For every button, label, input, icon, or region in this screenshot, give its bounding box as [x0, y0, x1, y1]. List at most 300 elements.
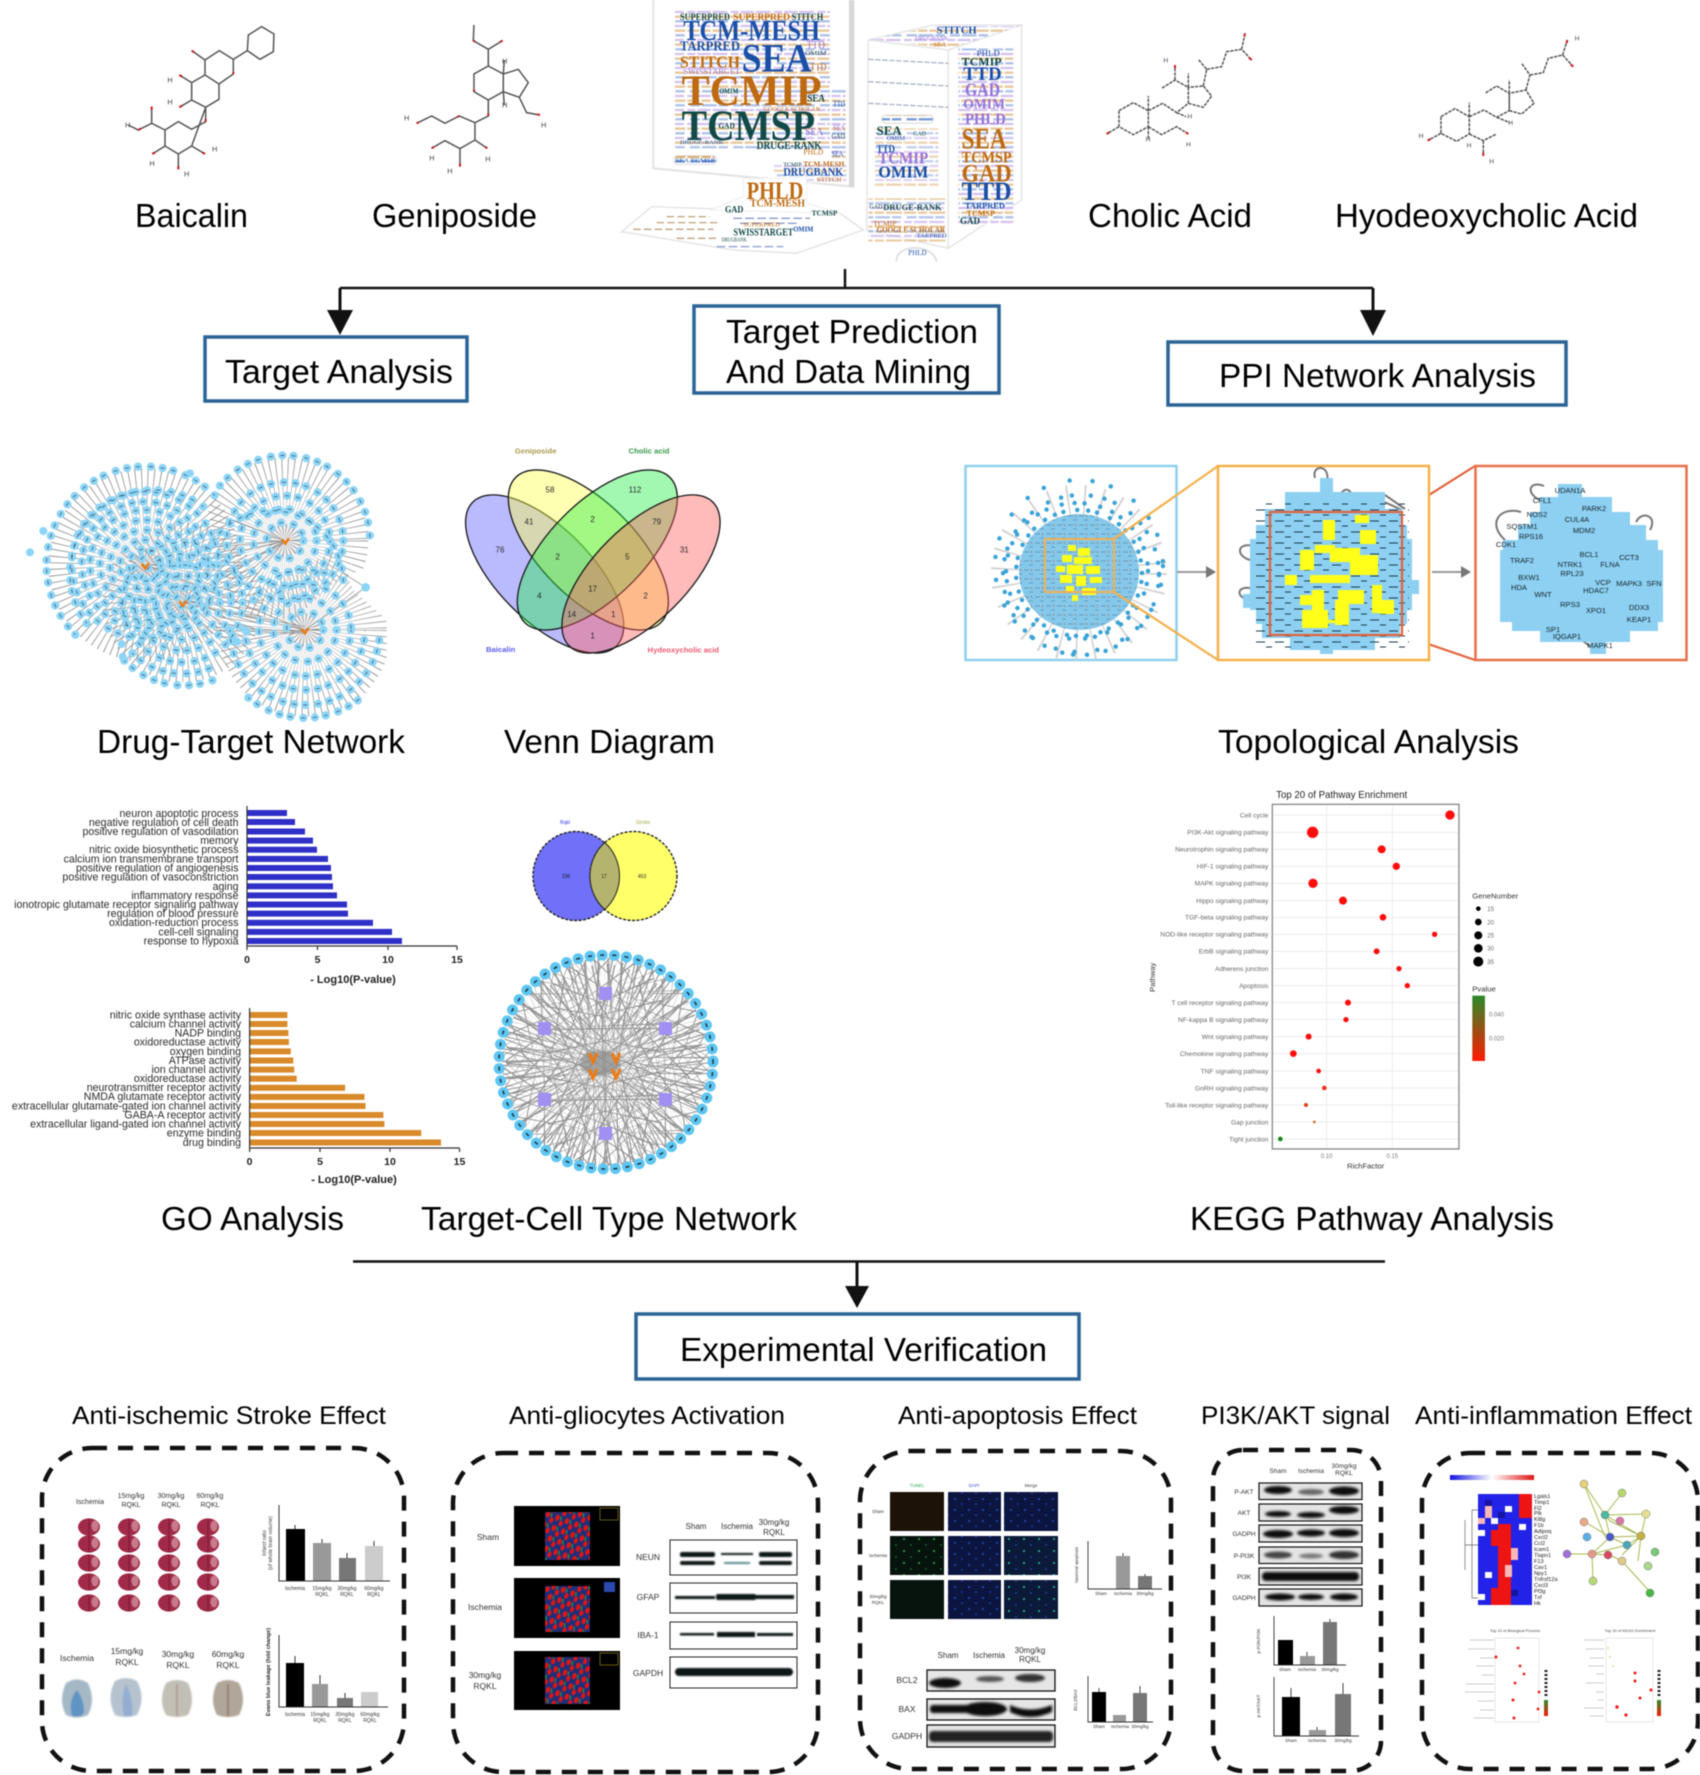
panel: core targets: CDK1: [1496, 540, 1516, 549]
panel: core targets: RPS16: [1519, 532, 1543, 541]
monitor stand and keyboard: TCMSP: [812, 209, 838, 218]
pathway labels: ErbB signaling pathway: [1199, 949, 1269, 956]
molecule: Geniposide: H: [404, 114, 409, 123]
computer tower: GAD: [965, 80, 1000, 101]
set names: Geniposide: [515, 446, 557, 455]
drug hubs: [589, 1053, 620, 1078]
infarct ratio chart: Ischemia: [285, 1586, 305, 1592]
counts: 1: [611, 610, 616, 619]
computer tower: TTD: [963, 64, 1002, 85]
TUNEL row labels: 30mg/kg: [869, 1594, 887, 1599]
panel: anti-apoptosis effect: [860, 1451, 1171, 1769]
blot headers: 30mg/kg: [1015, 1646, 1045, 1655]
title: Anti-gliocytes Activation: Anti-gliocytes Activation: [509, 1402, 785, 1430]
axis titles: 0.10: [1321, 1154, 1333, 1160]
Evans blue labels: 15mg/kg: [111, 1646, 144, 1656]
counts: 17: [588, 585, 598, 594]
monitor words: SUPERPRED: [733, 12, 791, 22]
molecule: Geniposide: H: [429, 154, 435, 163]
outer node label marks: [499, 955, 713, 1169]
counts: 2: [555, 552, 560, 561]
box: Target Analysis: Target Analysis: [225, 353, 453, 390]
blot labels: AKT: [1238, 1510, 1250, 1517]
Evans blue chart: [266, 1628, 388, 1724]
panel: core targets: CUL4A: [1565, 515, 1590, 524]
monitor words: OMIM: [805, 50, 827, 57]
molecule: Hyodeoxycholic Acid: [1419, 36, 1580, 165]
Evans blue labels: 30mg/kg: [162, 1649, 195, 1659]
two-set Venn diagram: 296: [562, 874, 570, 880]
panel: core targets: BCL1: [1580, 550, 1598, 559]
blot labels: BCL2: [896, 1675, 918, 1685]
heatmap gene labels: Plk: [1534, 1511, 1542, 1517]
monitor words: STITCH: [817, 177, 842, 184]
KEGG pathway bubble chart: [1148, 790, 1519, 1170]
TTC column labels: 30mg/kg: [158, 1493, 185, 1500]
legend: gene number: [1472, 892, 1519, 967]
category labels: negative regulation of cell death: [89, 817, 239, 829]
Evans blue chart: RQKL: [363, 1718, 377, 1724]
panel: full PPI network: [966, 466, 1176, 660]
pathway labels: Gap junction: [1231, 1119, 1269, 1126]
axes: [247, 806, 457, 950]
label: Geniposide: Geniposide: [372, 197, 537, 234]
molecule: Baicalin: [125, 27, 274, 179]
tick labels: 0: [247, 1156, 253, 1168]
heatmap: [1465, 1494, 1532, 1605]
blot labels: [1232, 1489, 1256, 1602]
monitor words: DRUGBANK: [783, 165, 844, 179]
heatmap gene labels: Fl2: [1534, 1506, 1542, 1512]
TUNEL headers: DAPI: [969, 1483, 979, 1488]
monitor words: SEA: [742, 36, 812, 81]
tick labels: 5: [315, 954, 321, 966]
western blot headers: 30mg/kg: [759, 1518, 789, 1527]
two-set Venn diagram: [533, 820, 677, 920]
panel: core targets: MAPK1: [1587, 641, 1613, 650]
computer tower: SEA: [933, 42, 947, 49]
TUNEL headers: Merge: [1025, 1483, 1038, 1488]
western blots: [1259, 1483, 1362, 1606]
legend: gene number: GeneNumber: [1472, 892, 1519, 901]
TUNEL row labels: Sham: [872, 1509, 884, 1514]
panel: anti-ischemic stroke effect: [42, 1448, 404, 1771]
pathway labels: Chemokine signaling pathway: [1180, 1051, 1269, 1058]
label: GO Analysis: GO Analysis: [161, 1200, 344, 1237]
legend: gene number: 35: [1487, 960, 1495, 966]
topological analysis panels: [966, 466, 1686, 660]
GO dot plot: [1465, 1628, 1548, 1722]
two-set Venn diagram: Rqkl: [560, 820, 570, 826]
blot headers: RQKL: [1335, 1470, 1353, 1477]
western blot labels: [633, 1552, 663, 1678]
computer tower: OMIM: [887, 135, 905, 142]
monitor words: TTD: [810, 63, 827, 74]
monitor stand and keyboard: GAD: [725, 205, 744, 215]
p-AKT chart: Ischemia: [1298, 1667, 1316, 1672]
counts: 4: [537, 592, 542, 601]
BCL2/BAX chart: Sham: [1093, 1724, 1105, 1729]
TUNEL row labels: Ischemia: [869, 1553, 887, 1558]
axis titles: Pathway: [1148, 962, 1157, 992]
heatmap gene labels: Tnfrsf12a: [1534, 1577, 1559, 1583]
zoom guide lines: [1114, 466, 1475, 660]
monitor stand and keyboard: PHLD: [747, 177, 803, 205]
heatmap gene labels: Timp1: [1534, 1500, 1549, 1506]
heatmap gene labels: Icam1: [1534, 1547, 1549, 1553]
legend: p-value: [1472, 985, 1505, 1061]
monitor words: GAD: [832, 131, 845, 140]
p-PI3K chart: Sham: [1285, 1738, 1297, 1743]
category labels: nitric oxide biosynthetic process: [89, 844, 238, 856]
monitor words: GOOGLE SCHOLAR: [763, 107, 820, 113]
axes: [250, 1008, 460, 1152]
box: PPI Network Analysis: PPI Network Analysis: [1219, 357, 1536, 394]
computer tower: TTD: [877, 142, 895, 156]
Evans blue chart: 30mg/kg: [335, 1712, 355, 1718]
enrichment bubbles: [1278, 810, 1455, 1141]
bars: [250, 1012, 441, 1146]
computer tower: [867, 25, 1022, 248]
Evans blue labels: 60mg/kg: [212, 1649, 245, 1659]
box: Target Prediction And Data Mining: [694, 306, 999, 393]
monitor stand and keyboard: SUPERPRED: [743, 222, 780, 229]
set names: [486, 446, 719, 655]
category labels: oxidoreductase activity: [134, 1036, 242, 1048]
box: Target Analysis: [205, 337, 467, 401]
western blot headers: Sham: [686, 1522, 707, 1531]
counts: 2: [590, 515, 595, 524]
molecule: Hyodeoxycholic Acid: H: [1467, 142, 1472, 149]
BCL2/BAX chart: BCL2/BAX: [1073, 1689, 1078, 1711]
ellipses: [440, 444, 746, 679]
computer tower: SEA: [962, 123, 1007, 155]
counts: 31: [680, 546, 689, 555]
p-PI3K chart: Ischemia: [1308, 1738, 1326, 1743]
monitor words: TTD: [807, 37, 825, 51]
protein interaction network: [1563, 1480, 1659, 1597]
legend: p-value: 0.020: [1489, 1037, 1505, 1043]
panel: core targets: MDM2: [1573, 526, 1595, 535]
pathway labels: TGF-beta signaling pathway: [1185, 915, 1269, 922]
molecule: Geniposide: [404, 25, 546, 175]
computer tower: GAD: [913, 131, 926, 138]
panel: core targets: NTRK1: [1558, 560, 1582, 569]
category labels: ionotropic glutamate receptor signaling pathway: [14, 899, 239, 911]
TTC column labels: RQKL: [121, 1502, 141, 1509]
computer tower: GAD: [960, 217, 980, 227]
Evans blue chart: 60mg/kg: [360, 1712, 380, 1718]
plot frame and grid: [1272, 804, 1459, 1149]
Evans blue labels: [60, 1646, 245, 1670]
infarct ratio chart: RQKL: [367, 1592, 381, 1598]
computer tower: GAD: [962, 160, 1012, 188]
legend: gene number: 15: [1487, 907, 1495, 913]
pathway labels: Adherens junction: [1215, 966, 1269, 973]
category labels: inflammatory response: [131, 890, 239, 902]
western blot headers: RQKL: [763, 1528, 785, 1537]
blot labels: GADPH: [1232, 1531, 1256, 1538]
computer tower: STITCH: [937, 25, 977, 36]
GO biological process bar chart: [14, 806, 463, 986]
label: Topological Analysis: Topological Analysis: [1218, 723, 1519, 760]
monitor words: GAD: [718, 121, 735, 130]
counts: 14: [567, 610, 577, 619]
immunofluorescence row labels: 30mg/kg: [469, 1670, 502, 1680]
title: PI3K/AKT signal: PI3K/AKT signal: [1201, 1402, 1390, 1430]
pathway labels: Neurotrophin signaling pathway: [1175, 847, 1269, 854]
p-AKT chart: p-PI3K/PI3K: [1256, 1629, 1261, 1653]
pathway labels: MAPK signaling pathway: [1195, 881, 1269, 888]
pathway labels: Cell cycle: [1240, 812, 1269, 819]
panel: core targets: DDX3: [1629, 603, 1649, 612]
monitor words: TCM-MESH: [683, 16, 820, 47]
TTC column labels: 15mg/kg: [118, 1493, 145, 1500]
hub shadow: [580, 1050, 620, 1076]
category labels: oxidation-reduction process: [109, 917, 238, 929]
tick labels: 0: [244, 954, 250, 966]
heatmap gene labels: Cxcl3: [1534, 1583, 1548, 1589]
tick labels: 15: [454, 1156, 465, 1168]
monitor words: TCMSP: [682, 102, 815, 150]
panel: core targets: NOS2: [1527, 510, 1547, 519]
monitor frame: [653, 0, 854, 187]
molecule: Hyodeoxycholic Acid: H: [1419, 133, 1424, 140]
category labels: aging: [213, 881, 239, 893]
title: Anti-inflammation Effect: Anti-inflammation Effect: [1415, 1402, 1692, 1430]
category labels: extracellular glutamate-gated ion channel activity: [12, 1100, 242, 1112]
set names: Baicalin: [486, 645, 516, 654]
monitor stand and keyboard: OMIM: [793, 225, 813, 234]
monitor words: STITCH: [792, 12, 823, 22]
arrows between panels: [1177, 566, 1471, 578]
panel: core targets: MAPK3: [1616, 579, 1642, 588]
heatmap gene labels: Ccl2: [1534, 1541, 1545, 1547]
label: Drug-Target Network: Drug-Target Network: [97, 723, 405, 760]
counts: 112: [629, 486, 642, 495]
molecule: Baicalin: H: [167, 76, 173, 85]
network edges: [97, 499, 366, 673]
category labels: calcium ion transmembrane transport: [64, 854, 239, 866]
bars: [247, 810, 402, 944]
western blot headers: Ischemia: [721, 1522, 754, 1531]
blot labels: GADPH: [1232, 1595, 1256, 1602]
computer tower: SEA: [877, 124, 903, 138]
counts: 79: [652, 517, 662, 526]
blot headers: [938, 1646, 1045, 1664]
TUNEL chart: [1074, 1541, 1162, 1596]
legend: gene number: 30: [1487, 947, 1495, 953]
drug hubs: [142, 538, 309, 633]
p-PI3K chart: [1256, 1677, 1359, 1743]
infarct ratio chart: RQKL: [315, 1592, 329, 1598]
pathway labels: TNF signaling pathway: [1201, 1068, 1269, 1075]
category labels: ion channel activity: [151, 1064, 242, 1076]
category labels: neurotransmitter receptor activity: [87, 1082, 242, 1094]
category labels: NMDA glutamate receptor activity: [84, 1091, 242, 1103]
tick labels: [244, 954, 463, 966]
category labels: NADP binding: [175, 1028, 241, 1040]
axis titles: [1148, 962, 1399, 1170]
monitor words: PHLD: [803, 146, 823, 156]
molecule: Geniposide: H: [502, 100, 507, 109]
panel: core targets: SQSTM1: [1506, 522, 1538, 531]
title: Anti-apoptosis Effect: Anti-apoptosis Effect: [898, 1402, 1137, 1430]
TTC column labels: Ischemia: [76, 1499, 104, 1506]
blot headers: [1270, 1463, 1357, 1477]
target nodes: [46, 455, 380, 718]
panel: core targets: UDAN1A: [1555, 486, 1586, 495]
GO molecular function bar chart: [12, 1008, 465, 1186]
Evans blue chart: RQKL: [338, 1718, 352, 1724]
pathway labels: GnRH signaling pathway: [1195, 1085, 1269, 1092]
computer tower: TCMSP: [962, 149, 1012, 166]
Evans blue labels: Ischemia: [60, 1653, 94, 1663]
molecule: Cholic Acid: H: [1187, 113, 1192, 120]
category labels: positive regulation of vasoconstriction: [62, 872, 239, 884]
monitor stand and keyboard: [622, 177, 937, 262]
heatmap gene labels: Npy1: [1534, 1571, 1547, 1577]
computer tower: OMIM: [878, 162, 929, 181]
molecule: Baicalin: H: [184, 170, 189, 179]
pathway labels: Apoptosis: [1239, 983, 1269, 990]
computer tower: GAD: [869, 203, 883, 210]
molecule: Geniposide: H: [541, 120, 546, 129]
molecule: Cholic Acid: H: [1163, 58, 1168, 65]
heatmap gene labels: Pf3g: [1534, 1589, 1546, 1595]
western blot headers: [686, 1518, 789, 1537]
box: Target Prediction And Data Mining: And Data Mining: [726, 353, 971, 390]
immunofluorescence images: [514, 1506, 620, 1710]
category labels: ATPase activity: [169, 1055, 242, 1067]
tick labels: 10: [382, 954, 394, 966]
infarct ratio chart: (of whole brain volume): [268, 1516, 274, 1570]
two-set Venn diagram: 453: [638, 874, 646, 880]
category labels: [14, 808, 239, 948]
category labels: oxidoreductase activity: [134, 1073, 242, 1085]
western blots: [927, 1670, 1055, 1747]
panel: anti-inflammation effect: [1422, 1453, 1698, 1769]
p-PI3K chart: p-AKT/AKT: [1256, 1694, 1261, 1717]
computer tower: PHLD: [965, 111, 1006, 128]
monitor words: SEA: [807, 94, 826, 105]
blot headers: 30mg/kg: [1332, 1463, 1357, 1470]
TTC column labels: 60mg/kg: [197, 1493, 224, 1500]
computer tower: PHLD: [977, 48, 1000, 58]
molecule: Baicalin: H: [167, 97, 173, 106]
western blot labels: GFAP: [637, 1592, 660, 1602]
infarct ratio chart: Infarct ratio: [262, 1530, 268, 1556]
category labels: oxygen binding: [170, 1046, 241, 1058]
Evans blue labels: RQKL: [166, 1660, 190, 1670]
molecule: Baicalin: H: [212, 145, 217, 154]
monitor words: TCMIP: [682, 67, 822, 115]
western blots: [670, 1540, 797, 1688]
monitor words: SEA: [833, 124, 845, 133]
KEGG dot plot: [1584, 1628, 1661, 1722]
TTC column labels: [76, 1493, 224, 1509]
Evans blue chart: RQKL: [313, 1718, 327, 1724]
panel: core targets: IQGAP1: [1553, 632, 1581, 641]
molecule: Hyodeoxycholic Acid: H: [1575, 36, 1580, 43]
heatmap gene labels: Adipoq: [1534, 1529, 1551, 1535]
TTC brain slices: [78, 1518, 219, 1612]
monitor stand and keyboard: TCM-MESH: [750, 199, 806, 210]
KEGG dot plot: Top 10 of KEGG Enrichment: [1605, 1628, 1656, 1633]
panel: core targets: [1476, 466, 1686, 660]
western blot labels: IBA-1: [637, 1630, 659, 1640]
TUNEL headers: TUNEL: [910, 1483, 925, 1488]
counts: [496, 486, 689, 640]
target-cell type network: [493, 948, 720, 1176]
category labels: neuron apoptotic process: [120, 808, 238, 820]
two-set Venn diagram: Stroke: [636, 820, 650, 826]
panel: core targets: FLNA: [1600, 560, 1621, 569]
computer tower: GOOGLE SCHOLAR: [877, 225, 945, 234]
computer tower: TARPRED: [965, 200, 1005, 210]
label: Cholic Acid: Cholic Acid: [1088, 197, 1252, 234]
monitor words: DRUGE-RANK: [757, 138, 822, 152]
blot labels: P-PI3K: [1234, 1553, 1255, 1560]
blot labels: BAX: [898, 1704, 916, 1714]
arrow to experimental verification: [353, 1261, 1385, 1308]
molecule: Geniposide: H: [485, 155, 491, 164]
category labels: positive regulation of vasodilation: [82, 826, 239, 838]
TUNEL row labels: RQKL: [872, 1600, 885, 1605]
panel: core targets: RPL23: [1560, 569, 1584, 578]
Venn diagram: [440, 444, 746, 679]
infarct ratio chart: 15mg/kg: [312, 1586, 332, 1592]
TUNEL headers: [910, 1483, 1038, 1488]
category labels: extracellular ligand-gated ion channel activity: [30, 1118, 242, 1130]
panel: core targets: BXW1: [1518, 573, 1540, 582]
monitor words: SEA: [832, 150, 843, 159]
molecule: Cholic Acid: [1107, 33, 1252, 149]
category labels: drug binding: [183, 1137, 241, 1149]
blot labels: GADPH: [892, 1731, 922, 1741]
category labels: [12, 1010, 242, 1149]
pathway labels: T cell receptor signaling pathway: [1171, 1000, 1269, 1007]
box: Experimental Verification: Experimental Verification: [680, 1331, 1047, 1368]
monitor words: SEA TCMSP: [675, 158, 715, 165]
category labels: enzyme binding: [167, 1128, 241, 1140]
molecule: Hyodeoxycholic Acid: H: [1489, 158, 1494, 165]
monitor words: [675, 12, 845, 184]
monitor words: TCMIP: [783, 162, 802, 169]
panel: PI3K/AKT signal: [1213, 1450, 1381, 1771]
axis titles: RichFactor: [1347, 1161, 1385, 1170]
label: Baicalin: Baicalin: [135, 197, 248, 234]
Evans blue chart: Ischemia: [285, 1712, 305, 1718]
edges: [502, 958, 710, 1166]
label: KEGG Pathway Analysis: KEGG Pathway Analysis: [1190, 1200, 1554, 1237]
counts: 76: [496, 546, 505, 555]
immunofluorescence row labels: Sham: [477, 1532, 499, 1542]
western blot labels: GAPDH: [633, 1668, 663, 1678]
computer tower: TCMIP: [878, 148, 928, 167]
title: Anti-ischemic Stroke Effect: Anti-ischemic Stroke Effect: [72, 1402, 386, 1430]
infarct ratio chart: RQKL: [340, 1592, 354, 1598]
panel: core targets: HDA: [1511, 583, 1528, 592]
panel: core targets: HDAC7: [1583, 586, 1609, 595]
node label marks: [46, 455, 380, 718]
panel: core targets: RPS3: [1560, 600, 1580, 609]
blot labels: PI3K: [1237, 1574, 1252, 1581]
p-AKT chart: 30mg/kg: [1321, 1667, 1339, 1672]
molecule: Cholic Acid: H: [1186, 142, 1191, 149]
heatmap gene labels: F13: [1534, 1559, 1544, 1565]
pathway labels: [1160, 812, 1269, 1143]
